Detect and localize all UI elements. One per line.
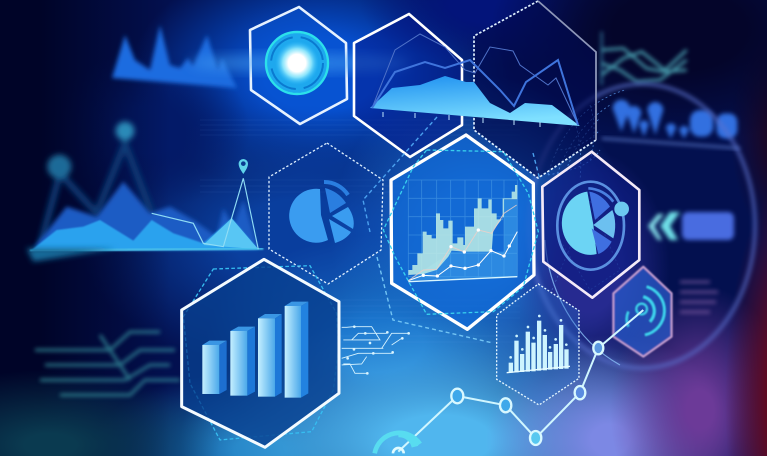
panel: bottom bars hexagon (497, 284, 579, 405)
outer ring (557, 182, 624, 270)
big blurred ring, right (529, 84, 755, 368)
icon: radar arcs (627, 287, 664, 335)
pie chart (562, 192, 597, 255)
icon: location pin (239, 159, 248, 174)
white trend lines (408, 205, 517, 281)
panel: top left glowing hexagon (190, 7, 410, 124)
blurred text lines, right (680, 282, 718, 312)
icon: glowing radial gauge (190, 32, 410, 94)
blurred wavy lines chart, top right (602, 32, 687, 85)
blurred circuits, left (35, 332, 180, 395)
grid (408, 180, 517, 277)
stepped area chart (408, 185, 517, 275)
panel: small radar hexagon (613, 267, 672, 357)
base line (30, 249, 263, 251)
area and line chart across two hexagons (370, 34, 580, 127)
dark blurred line with round markers (40, 122, 152, 247)
panel: radar pie hexagon (542, 152, 639, 298)
blurred area chart, top left (112, 25, 237, 88)
panel: bar chart hexagon (182, 259, 410, 447)
dark area (33, 182, 258, 249)
light area (32, 218, 258, 250)
dashed outline around the hexagon (383, 150, 538, 314)
dashed connector lines (363, 117, 540, 343)
line chart with circular markers, bottom (375, 310, 643, 453)
panel: mountain chart hexagon (354, 14, 462, 157)
circuit lines (342, 327, 409, 373)
blurred chart with markers, left (27, 122, 263, 262)
panel: dashed pie hexagon (269, 143, 383, 284)
globe mesh (545, 90, 625, 365)
lower blue area (408, 200, 517, 281)
3D bars (202, 302, 308, 398)
dashed outline behind hexagon (183, 266, 338, 440)
bar chart (507, 315, 570, 373)
icon: gauge at line start (375, 433, 420, 453)
blurred pins and ring, right (602, 100, 740, 148)
background streak lines (200, 120, 520, 342)
pie chart icon (289, 182, 354, 243)
panel: central chart hexagon (383, 135, 538, 329)
thin line (152, 178, 258, 249)
blurred chevrons, right (648, 212, 734, 240)
panel: dashed line chart hexagon (474, 1, 596, 178)
